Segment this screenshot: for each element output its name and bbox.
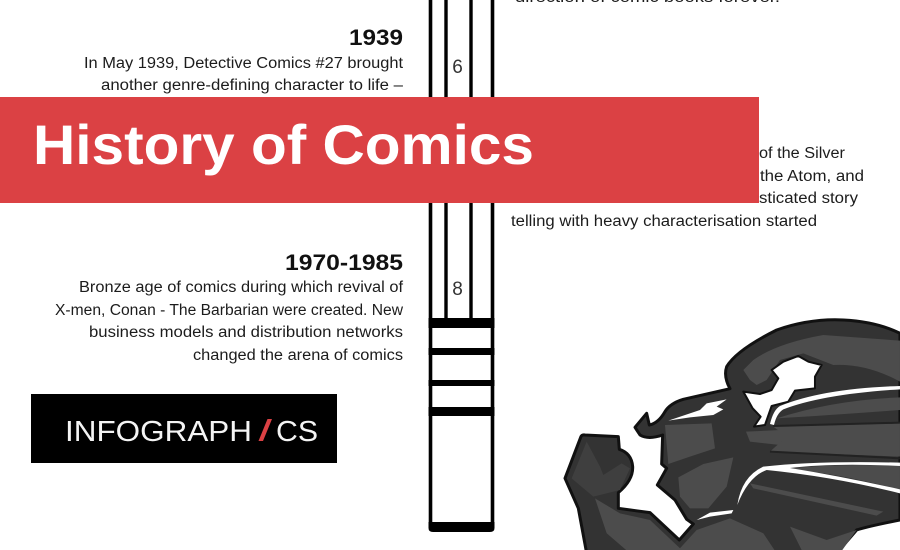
logo badge: Infographics bbox=[31, 394, 337, 463]
white highlights bbox=[668, 356, 900, 520]
text block: Silver age: the Atom, and bbox=[760, 168, 864, 185]
text block: 1939: another genre-defining character to life – bbox=[101, 77, 403, 94]
text block: 1970-1985: X-men, Conan - The Barbarian were created. New bbox=[55, 302, 404, 319]
text block: 1939: 1939 bbox=[349, 25, 403, 50]
lighter shading bbox=[572, 335, 900, 550]
text block: Silver age: sticated story bbox=[759, 190, 858, 207]
title banner bbox=[0, 97, 759, 203]
text block: 1970-1985 bbox=[55, 250, 404, 364]
text block: 1970-1985: changed the arena of comics bbox=[193, 347, 403, 364]
logo badge: Infographics: INFOGRAPH bbox=[65, 416, 252, 448]
text block: 1970-1985: Bronze age of comics during which revival of bbox=[79, 279, 404, 296]
timeline number 8: 8 bbox=[452, 279, 463, 300]
title: History of Comics bbox=[33, 113, 534, 176]
timeline number 6: 6 bbox=[452, 57, 463, 78]
text block: 1939 bbox=[84, 25, 404, 94]
text block: Silver age: of the Silver bbox=[759, 145, 845, 162]
icon: superhero illustration bbox=[565, 320, 900, 550]
dark cape fold lines bbox=[770, 423, 900, 458]
text block: 1939: In May 1939, Detective Comics #27 brought bbox=[84, 55, 404, 72]
logo badge: Infographics: CS bbox=[276, 416, 318, 448]
text block: 1970-1985: business models and distribution networks bbox=[89, 324, 403, 341]
text block: Silver age bbox=[511, 145, 864, 230]
text block: Silver age: telling with heavy characterisation started bbox=[511, 213, 817, 230]
text block: 1970-1985: 1970-1985 bbox=[285, 250, 403, 275]
timeline tube bbox=[428, 0, 494, 532]
